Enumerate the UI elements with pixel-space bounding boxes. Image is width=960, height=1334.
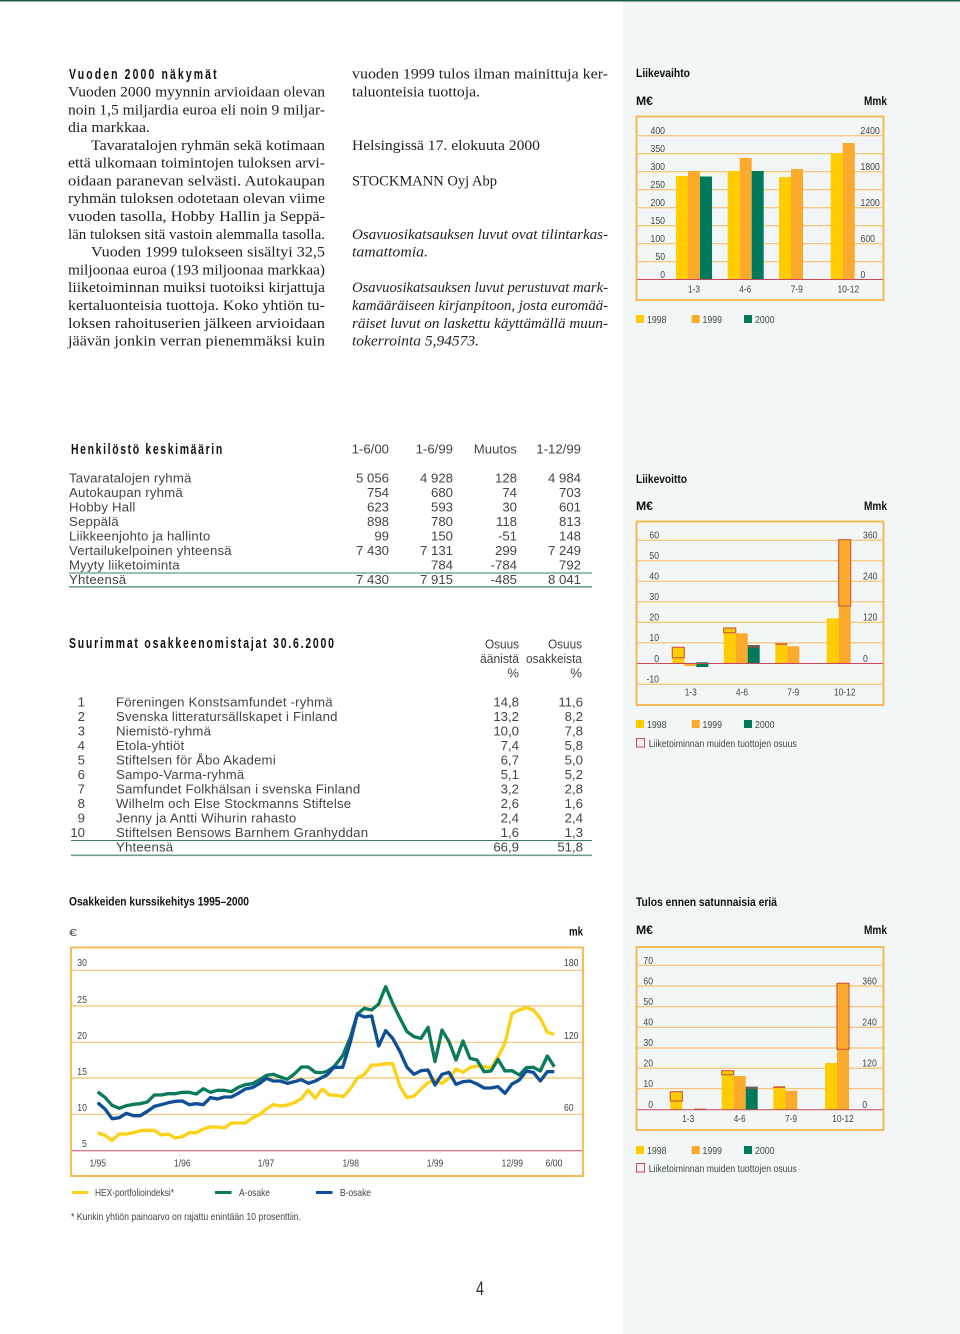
axis labels: 10 — [77, 1102, 87, 1114]
table rows: 1,3 — [565, 825, 583, 840]
axis labels: 10-12 — [832, 1113, 854, 1125]
table rows: 7 915 — [420, 572, 453, 587]
legend: 2000 — [755, 719, 775, 731]
table rows: 10 — [70, 825, 85, 840]
chart: Liikevaihto: Mmk — [864, 94, 887, 108]
axis labels: 5 — [82, 1138, 87, 1150]
text column: right body text: Helsingissä 17. elokuuta 2000 — [352, 138, 540, 154]
chart: Osakkeiden kurssikehitys: mk — [569, 924, 583, 938]
table rows: Sampo-Varma-ryhmä — [116, 767, 245, 782]
table rows: Wilhelm och Else Stockmanns Stiftelse — [116, 796, 351, 811]
table rows: 7 430 — [356, 572, 389, 587]
chart: Liikevoitto: Mmk — [864, 499, 887, 513]
axis labels: 1/98 — [342, 1158, 359, 1170]
table rows: 1 — [78, 694, 85, 710]
body text, left column: dia markkaa. — [68, 120, 150, 136]
axis labels: 40 — [649, 570, 659, 582]
legend — [636, 719, 797, 750]
green line: A-osake — [98, 987, 554, 1108]
bars — [676, 143, 855, 280]
table rows: 150 — [431, 528, 453, 544]
text column: right body text: kamääräiseen kirjanpitoon, josta euromää- — [352, 298, 608, 314]
text column: right body text: Osavuosikatsauksen luvut ovat tilintarkas- — [352, 227, 608, 243]
axis labels: 12/99 — [502, 1158, 523, 1170]
table heading: Suurimmat osakkeenomistajat 30.6.2000 — [69, 635, 334, 651]
chart: Osakkeiden kurssikehitys: € — [69, 927, 77, 939]
axis labels: 60 — [643, 976, 653, 988]
blue line: B-osake — [98, 1014, 554, 1119]
axis labels: 7-9 — [785, 1113, 797, 1125]
axis labels: 70 — [643, 955, 653, 967]
body text, left column: kertaluonteisia tuottoja. Koko yhtiön tu- — [68, 298, 325, 314]
text column: right body text: tokerrointa 5,94573. — [352, 334, 479, 350]
axis labels: 60 — [564, 1102, 574, 1114]
table rows: 51,8 — [557, 840, 583, 854]
table rows: Hobby Hall — [69, 500, 136, 514]
axis labels: 250 — [650, 179, 665, 191]
table rows: 4 984 — [548, 470, 581, 486]
axis labels: 180 — [564, 957, 579, 969]
table rows: 7 430 — [356, 543, 389, 558]
table rows: 7,4 — [501, 738, 519, 753]
legend — [636, 314, 775, 326]
legend: A-osake — [239, 1187, 270, 1199]
table rows: 13,2 — [493, 709, 519, 724]
table rows: 148 — [559, 528, 581, 544]
chart: Tulos ennen satunnaisia eriä: M€ — [636, 923, 653, 937]
body text, left column: loksen rahoituserien jälkeen arvioidaan — [68, 316, 326, 332]
chart title: Osakkeiden kurssikehitys 1995–2000 — [69, 894, 249, 908]
table rows: Niemistö-ryhmä — [116, 724, 212, 738]
axis labels: 240 — [863, 570, 878, 582]
table rows: Stiftelsen Bensows Barnhem Granhyddan — [116, 825, 368, 840]
table rows — [69, 470, 581, 587]
axis labels: 7-9 — [787, 686, 799, 698]
chart: Tulos ennen satunnaisia eriä — [636, 895, 887, 1175]
axis labels: 120 — [863, 612, 878, 624]
axis labels: 1/99 — [427, 1158, 443, 1170]
table rows: Föreningen Konstsamfundet -ryhmä — [116, 694, 333, 710]
table rows: 898 — [367, 514, 389, 529]
body text, left column: Vuoden 1999 tulokseen sisältyi 32,5 — [91, 245, 325, 261]
table rows: 3 — [78, 724, 85, 738]
axis labels: 25 — [77, 994, 87, 1006]
table rows: 8,2 — [565, 709, 583, 724]
axis labels: 1/95 — [89, 1158, 106, 1170]
column headers: Osuus — [548, 636, 582, 652]
table rows: 780 — [431, 514, 453, 529]
chart: Liikevoitto: M€ — [636, 499, 653, 513]
table rows: 299 — [495, 543, 517, 558]
column headers: Muutos — [474, 442, 517, 456]
axis labels: 120 — [564, 1030, 579, 1042]
body text, left column: vuoden tasolla, Hobby Hallin ja Seppä- — [68, 209, 325, 225]
axis labels: 20 — [77, 1030, 87, 1042]
table rows: 10,0 — [493, 724, 519, 738]
table rows: 2 — [78, 709, 85, 724]
table rows: 5,0 — [565, 752, 583, 768]
body text, left column: Tavaratalojen ryhmän sekä kotimaan — [91, 138, 326, 154]
axis labels: 0 — [863, 653, 868, 665]
chart: Tulos ennen satunnaisia eriä: Mmk — [864, 923, 887, 937]
heading: Vuoden 2000 näkymät: Vuoden 2000 näkymät — [69, 66, 217, 82]
axis labels: 1-3 — [682, 1113, 694, 1125]
axis labels: 6/00 — [546, 1158, 563, 1170]
chart title: Liikevoitto — [636, 472, 687, 486]
axis labels: 100 — [650, 233, 665, 245]
table rows: 9 — [78, 810, 85, 826]
table: Henkilöstö keskimäärin — [69, 441, 592, 588]
table rows: 7,8 — [565, 724, 583, 738]
axis labels: 50 — [649, 550, 659, 562]
table rows: 66,9 — [493, 840, 519, 854]
body text, left column: liiketoiminnan muiksi tuotoiksi kirjattuja — [68, 280, 325, 296]
axis labels: 1200 — [860, 197, 880, 209]
table rows: 30 — [502, 500, 517, 514]
table rows: 601 — [559, 500, 581, 514]
table rows: Etola-yhtiöt — [116, 738, 185, 753]
table rows: 14,8 — [493, 694, 519, 710]
column headers: äänistä — [480, 651, 520, 666]
text column: right body text — [352, 67, 608, 350]
axis labels: 4-6 — [739, 284, 751, 296]
axis labels: 1800 — [860, 161, 880, 173]
axis labels: 2400 — [860, 125, 880, 137]
axis labels: 20 — [649, 612, 659, 624]
table rows: 754 — [367, 485, 389, 500]
legend: 1999 — [702, 314, 722, 326]
axis labels: -10 — [646, 674, 659, 686]
table rows: 792 — [559, 558, 581, 572]
table rows: 2,4 — [565, 810, 583, 826]
table rows: 74 — [502, 485, 517, 500]
column headers: osakkeista — [526, 651, 583, 666]
table heading: Henkilöstö keskimäärin — [71, 441, 222, 457]
table rows: 680 — [431, 485, 453, 500]
axis labels — [643, 955, 877, 1125]
axis labels: 360 — [862, 976, 877, 988]
column headers: 1-6/99 — [416, 442, 453, 456]
column headers: % — [507, 666, 519, 680]
legend: 1998 — [647, 719, 667, 731]
axis labels: 120 — [862, 1058, 877, 1070]
text column: right body text: STOCKMANN Oyj Abp — [352, 173, 497, 189]
chart: Liikevoitto — [636, 472, 887, 750]
table rows: 703 — [559, 485, 581, 500]
axis labels — [650, 125, 880, 296]
table rows: 2,4 — [501, 810, 519, 826]
column headers — [480, 636, 583, 680]
table rows: Stiftelsen för Åbo Akademi — [116, 752, 276, 768]
axis labels: 0 — [862, 1099, 867, 1111]
axis labels: 360 — [863, 530, 878, 542]
axis labels: 4-6 — [734, 1113, 746, 1125]
body text, left column: noin 1,5 miljardia euroa eli noin 9 miljar- — [68, 102, 325, 118]
axis labels: 240 — [862, 1016, 877, 1028]
axis labels: 4-6 — [736, 686, 748, 698]
table rows: 3,2 — [501, 782, 519, 796]
chart: Osakkeiden kurssikehitys — [69, 894, 583, 1223]
table rows: 5,1 — [501, 767, 519, 782]
table: Suurimmat osakkeenomistajat — [69, 635, 592, 856]
table rows: 4 — [78, 738, 85, 753]
axis labels: 10-12 — [834, 686, 856, 698]
table rows: 5,2 — [565, 767, 583, 782]
axis labels: 0 — [648, 1099, 653, 1111]
axis labels: 0 — [654, 653, 659, 665]
table rows: 7 — [78, 782, 85, 796]
table rows: 6 — [78, 767, 85, 782]
table rows: 593 — [431, 500, 453, 514]
axis labels — [646, 530, 878, 698]
table rows: Seppälä — [69, 514, 119, 529]
axis labels: 40 — [643, 1016, 653, 1028]
axis labels: 30 — [649, 591, 659, 603]
axis labels: 400 — [650, 125, 665, 137]
yellow line: HEX-portfolioindeksi — [98, 1008, 554, 1140]
table rows: Myyty liiketoiminta — [69, 558, 180, 572]
legend: 1998 — [647, 314, 667, 326]
table rows: 813 — [559, 514, 581, 529]
legend — [72, 1187, 371, 1199]
table rows: -485 — [491, 572, 517, 587]
column headers: 1-12/99 — [536, 442, 581, 456]
chart title: Liikevaihto — [636, 66, 690, 80]
table rows: 784 — [431, 558, 453, 572]
body text, left column: oidaan paranevan selvästi. Autokaupan — [68, 173, 326, 189]
bars — [672, 540, 851, 667]
table rows: 1,6 — [501, 825, 519, 840]
axis labels: 0 — [860, 269, 865, 281]
table rows: -784 — [491, 558, 517, 572]
table rows: 8 041 — [548, 572, 581, 587]
table rows: -51 — [498, 528, 517, 544]
chart title: Tulos ennen satunnaisia eriä — [636, 895, 777, 909]
text column: Vuoden 2000 näkymät — [67, 66, 326, 350]
legend: 1998 — [647, 1145, 667, 1157]
table rows: 11,6 — [558, 694, 583, 710]
axis labels: 10 — [643, 1078, 653, 1090]
text column: right body text: taluonteisia tuottoja. — [352, 84, 480, 100]
axis labels: 10 — [649, 632, 659, 644]
body text, left column: Vuoden 2000 myynnin arvioidaan olevan — [68, 84, 326, 100]
axis labels: 50 — [655, 251, 665, 263]
axis labels: 60 — [649, 530, 659, 542]
table rows: Yhteensä — [69, 572, 127, 587]
footnote: * Kunkin yhtiön painoarvo on rajattu enintään 10 prosenttiin. — [71, 1211, 301, 1223]
table rows: Svenska litteratursällskapet i Finland — [116, 709, 338, 724]
axis labels: 10-12 — [837, 284, 859, 296]
axis labels: 1-3 — [685, 686, 697, 698]
legend: B-osake — [340, 1187, 371, 1199]
table rows: 118 — [496, 514, 517, 529]
table rows: 2,8 — [565, 782, 583, 796]
legend: 1999 — [702, 1145, 722, 1157]
axis labels: 30 — [643, 1037, 653, 1049]
legend — [636, 1145, 797, 1175]
table rows: 2,6 — [501, 796, 519, 811]
chart: Liikevaihto — [636, 66, 887, 326]
column headers: Osuus — [485, 636, 519, 652]
axis labels: 50 — [643, 996, 653, 1008]
table rows: 5,8 — [565, 738, 583, 753]
legend: Liiketoiminnan muiden tuottojen osuus — [649, 738, 797, 750]
legend: 2000 — [755, 314, 775, 326]
body text, left column: län tuloksen sitä vastoin alemmalla tasolla. — [68, 227, 325, 243]
page number: 4 — [476, 1279, 484, 1300]
axis labels: 1/97 — [258, 1158, 274, 1170]
axis labels: 1-3 — [688, 284, 700, 296]
table rows: 1,6 — [565, 796, 583, 811]
text column: right body text: Osavuosikatsauksen luvut perustuvat mark- — [352, 280, 608, 296]
axis labels: 1/96 — [174, 1158, 191, 1170]
table rows: Samfundet Folkhälsan i svenska Finland — [116, 782, 360, 796]
body text, left column: ryhmän tuloksen odotetaan olevan viime — [68, 191, 325, 207]
column headers — [352, 442, 581, 456]
axis labels: 350 — [650, 143, 665, 155]
table rows: Vertailukelpoinen yhteensä — [69, 543, 232, 558]
body text, left column: miljoonaa euroa (193 miljoonaa markkaa) — [68, 262, 325, 278]
axis labels: 20 — [643, 1058, 653, 1070]
table rows: 6,7 — [501, 752, 519, 768]
text column: right body text: vuoden 1999 tulos ilman mainittuja ker- — [352, 67, 608, 83]
table rows: 4 928 — [420, 470, 453, 486]
text column: right body text: räiset luvut on laskettu käyttämällä muun- — [352, 316, 608, 332]
axis labels: 600 — [860, 233, 875, 245]
table rows: 5 056 — [356, 470, 389, 486]
chart: Liikevaihto: M€ — [636, 94, 653, 108]
table rows: 623 — [367, 500, 389, 514]
axis labels: 150 — [650, 215, 665, 227]
table rows: Tavaratalojen ryhmä — [69, 470, 192, 486]
table rows: 7 131 — [420, 543, 453, 558]
axis labels: 200 — [650, 197, 665, 209]
axis labels: 30 — [77, 957, 87, 969]
axis labels: 0 — [660, 269, 665, 281]
table rows: Liikkeenjohto ja hallinto — [69, 528, 210, 544]
legend: HEX-portfolioindeksi* — [95, 1187, 174, 1199]
text column: right body text: tamattomia. — [352, 245, 428, 261]
table rows: 5 — [78, 752, 85, 768]
table rows: Jenny ja Antti Wihurin rahasto — [116, 810, 296, 826]
body text, left column: että ulkomaan toimintojen tuloksen arvi- — [68, 156, 325, 172]
table rows: Yhteensä — [116, 840, 174, 854]
legend: 2000 — [755, 1145, 775, 1157]
table rows: 8 — [78, 796, 85, 811]
column headers: % — [570, 666, 582, 680]
table rows: 128 — [495, 470, 517, 486]
bars — [670, 983, 849, 1110]
table rows — [70, 694, 583, 854]
body text, left column — [67, 84, 326, 350]
axis labels: 15 — [77, 1066, 87, 1078]
axis labels — [77, 957, 579, 1170]
axis labels: 7-9 — [791, 284, 803, 296]
body text, left column: jäävän jonkin verran pienemmäksi kuin — [67, 334, 326, 350]
table rows: 7 249 — [548, 543, 581, 558]
legend: 1999 — [702, 719, 722, 731]
axis labels: 300 — [650, 161, 665, 173]
legend: Liiketoiminnan muiden tuottojen osuus — [649, 1163, 797, 1175]
table rows: Autokaupan ryhmä — [69, 485, 183, 500]
column headers: 1-6/00 — [352, 442, 389, 456]
table rows: 99 — [374, 528, 389, 544]
